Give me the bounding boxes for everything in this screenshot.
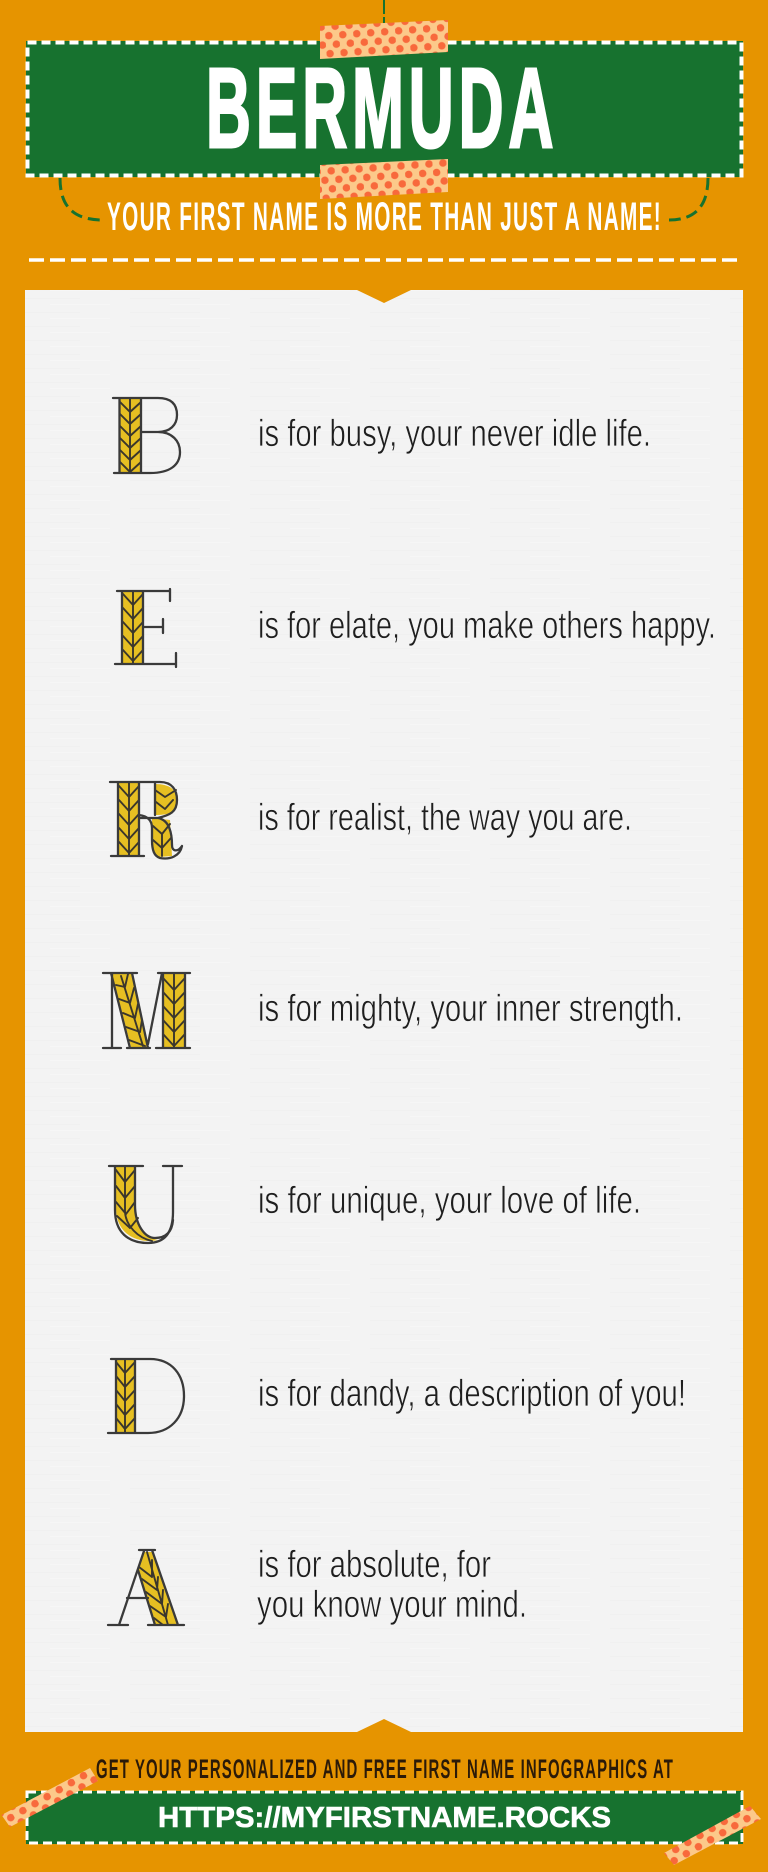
bracket: left [60,178,103,220]
title: BERMUDA [206,45,558,172]
row A: you know your mind. [257,1584,527,1626]
bracket: right [669,178,708,220]
letter B [113,398,180,473]
text: U: is for unique, your love of life. [258,1180,641,1222]
row E [115,589,716,667]
letter D [108,1359,184,1433]
url: HTTPS://MYFIRSTNAME.ROCKS [158,1802,611,1834]
row A [108,1544,527,1626]
row B [113,398,651,473]
row M [103,973,683,1048]
panel: letters [25,290,743,1732]
text: R: is for realist, the way you are. [258,797,632,839]
letter M [103,973,190,1048]
letter E [115,589,176,667]
text: B: is for busy, your never idle life. [258,413,651,455]
hanging line [383,0,385,24]
dashed divider [29,258,738,262]
text: A: is for absolute, for [258,1544,491,1586]
letter R [110,782,182,858]
row U [109,1166,641,1243]
tape: footer left [2,1768,98,1827]
letter U [109,1166,182,1243]
tape: footer right [664,1806,761,1865]
row R [110,782,632,858]
row D [108,1359,686,1433]
tape: bottom of banner [320,159,448,199]
letter A [108,1550,184,1625]
title banner [26,41,743,177]
footer banner [26,1791,743,1844]
tape: top [320,20,448,59]
